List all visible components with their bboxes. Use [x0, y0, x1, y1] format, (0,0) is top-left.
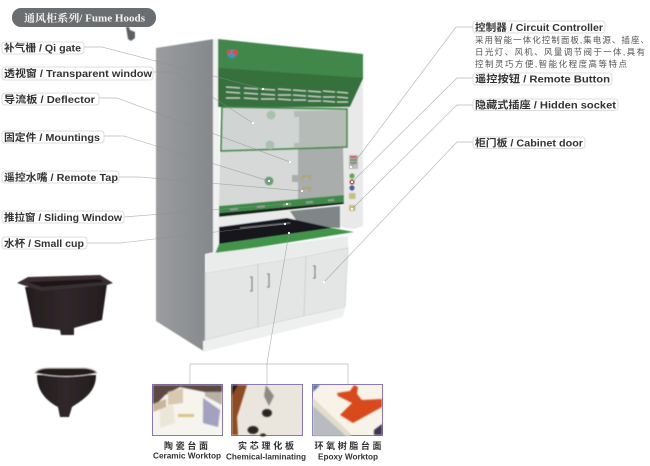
caption: epoxy worktop: [314, 440, 382, 462]
leader lines: [84, 27, 473, 384]
inner back wall: [219, 146, 344, 206]
right control column: [343, 79, 363, 229]
small cup photo: rectangular: [17, 275, 113, 335]
label: Remote Tap: 遥控水嘴 / Remote Tap: [4, 171, 118, 184]
label: Deflector: 导流板 / Deflector: [4, 93, 95, 106]
caption: ceramic worktop: 陶瓷台面: [164, 440, 208, 451]
label: Transparent window: 透视窗 / Transparent window: [4, 67, 152, 80]
black worktop: [219, 218, 332, 244]
window shade: [294, 110, 346, 148]
sash grips: [230, 200, 334, 210]
plinth: [203, 307, 345, 352]
side panel: [156, 39, 214, 352]
hidden sockets: [349, 193, 356, 211]
description: controller text: 日光灯、风机、风量调节阀于一体,具有: [475, 47, 645, 57]
leader dots: [252, 88, 353, 283]
caption: ceramic worktop: [153, 440, 221, 460]
sliding window bar: [219, 195, 344, 213]
photo: epoxy worktop: [312, 384, 382, 436]
caption: chemical-laminating: 实芯理化板: [238, 440, 294, 451]
description: controller text: 控制灵巧方便,智能化程度高等特点: [475, 59, 627, 69]
sink highlight: [240, 223, 290, 228]
remote taps: [302, 176, 310, 192]
icon: pointing hand: [126, 27, 135, 41]
caption: epoxy worktop: Epoxy Worktop: [318, 452, 378, 462]
caption: epoxy worktop: 环氧树脂台面: [314, 440, 382, 451]
heading pill: Fume Hoods: [12, 8, 156, 27]
door handles: [250, 266, 315, 291]
fume hood cabinet: [156, 39, 363, 352]
sliding bar shadow: [219, 202, 344, 217]
photo: ceramic worktop: [152, 384, 222, 436]
caption: chemical-laminating: Chemical-laminating: [226, 452, 306, 462]
green hood top: [218, 39, 363, 107]
caption: ceramic worktop: Ceramic Worktop: [153, 452, 221, 460]
label: Hidden socket: 隐藏式插座 / Hidden socket: [475, 98, 617, 112]
heading pill: Fume Hoods: 通风柜系列/ Fume Hoods: [24, 12, 145, 24]
green lip: [215, 228, 354, 254]
description: controller text: [475, 35, 649, 69]
label: Cabinet door: 柜门板 / Cabinet door: [475, 136, 583, 150]
description: controller text: 采用智能一体化控制面板,集电源、插座、: [475, 35, 649, 45]
opening shade: [290, 206, 340, 228]
small cup photo: funnel: [35, 368, 97, 417]
label: Sliding Window: 推拉窗 / Sliding Window: [4, 211, 122, 224]
label: Small cup: 水杯 / Small cup: [4, 237, 84, 250]
label: Remote Button: 遥控按钮 / Remote Button: [475, 72, 610, 86]
vent slots: [226, 87, 348, 102]
hood shadow band: [218, 68, 363, 107]
photo: chemical-laminating worktop: [232, 384, 302, 436]
label: Mountings: 固定件 / Mountings: [4, 131, 100, 144]
logo: [227, 50, 238, 58]
label: Qi gate: 补气栅 / Qi gate: [4, 42, 81, 54]
control panel: [349, 155, 358, 169]
transparent window: [221, 107, 347, 151]
window round fixings: [266, 110, 276, 150]
front frame: [213, 39, 219, 256]
label: Circuit Controller: 控制器 / Circuit Controller: [475, 21, 603, 34]
base doors: [205, 248, 348, 340]
control buttons: [349, 173, 355, 191]
opening back: [219, 205, 344, 228]
caption: chemical-laminating: [226, 440, 306, 462]
mounting: [264, 176, 274, 186]
base top: [206, 236, 348, 272]
inner back wall shade: [292, 146, 344, 199]
